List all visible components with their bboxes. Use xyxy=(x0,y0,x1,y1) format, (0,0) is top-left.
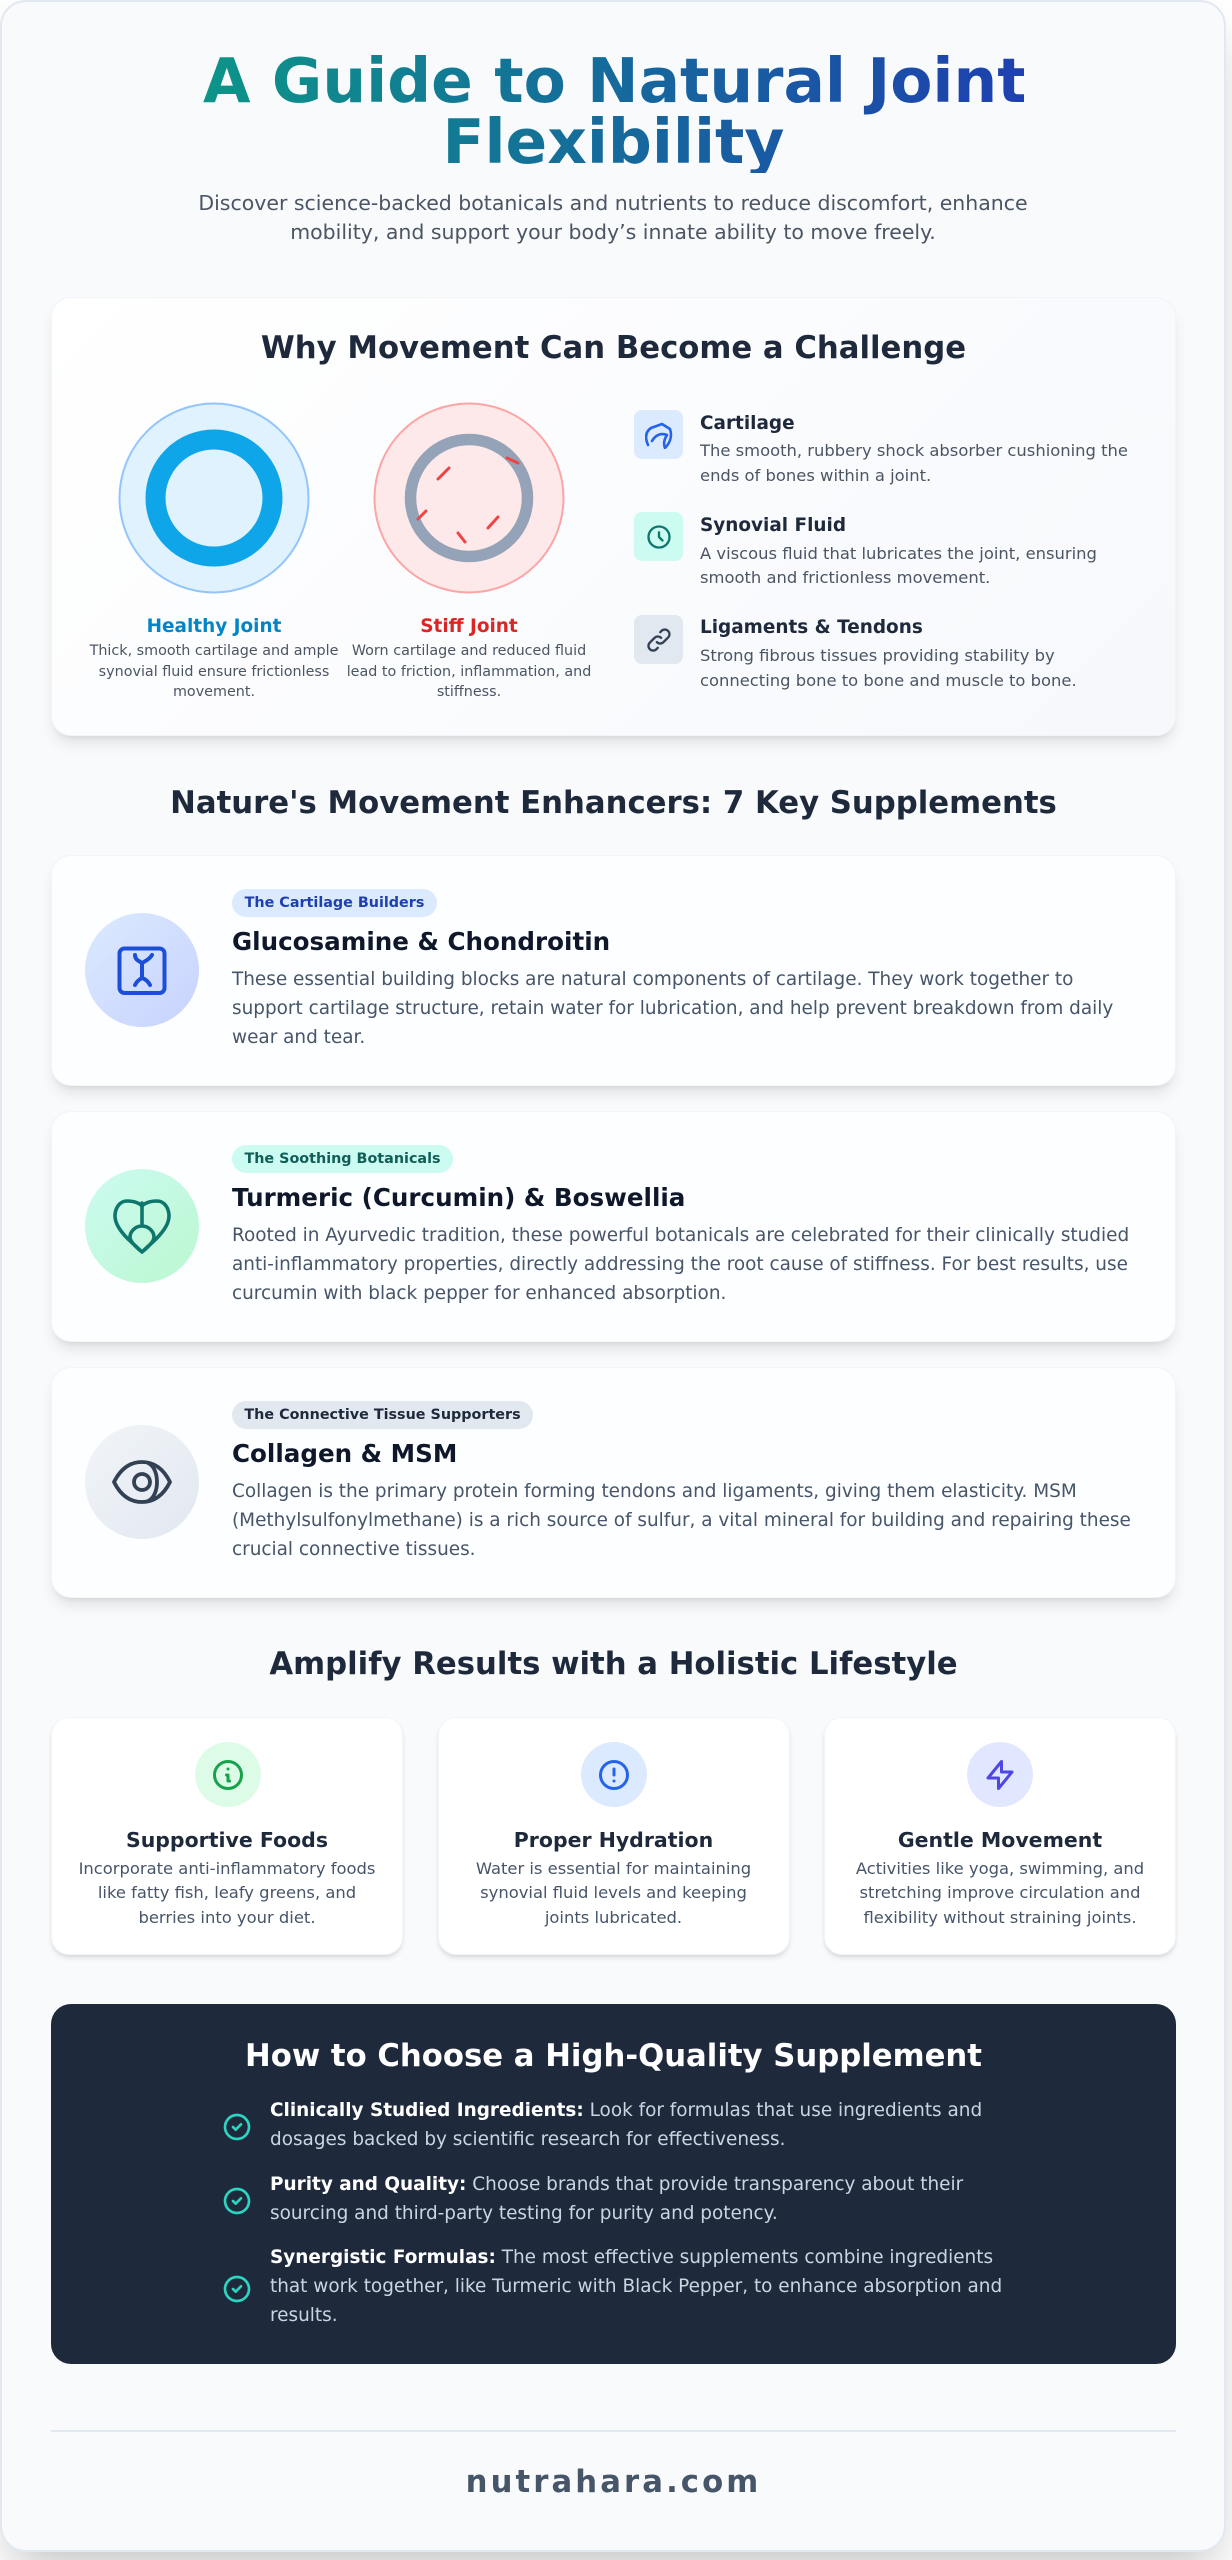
title: gentle movement: Gentle Movement xyxy=(898,1828,1102,1852)
text: purity and quality: sourcing and third-party testing for purity and potency. xyxy=(270,2203,778,2224)
text: collagen description: Collagen is the primary protein forming tendons and ligaments, giving them elasticity. MSM xyxy=(232,1481,1077,1502)
pill: the connective tissue supporters: The Connective Tissue Supporters xyxy=(244,1407,521,1423)
text: collagen description xyxy=(232,1481,1131,1560)
text: cartilage description xyxy=(700,441,1128,485)
text: glucosamine description: wear and tear. xyxy=(232,1027,365,1048)
text: gentle movement description: stretching improve circulation and xyxy=(860,1883,1140,1902)
text: synergistic formulas: Synergistic Formulas: The most effective supplements combine ingredients xyxy=(270,2247,993,2268)
title: supportive foods: Supportive Foods xyxy=(126,1828,328,1852)
title: glucosamine: Glucosamine & Chondroitin xyxy=(232,926,610,956)
text: purity and quality xyxy=(270,2174,964,2224)
text: synovial fluid title: Synovial Fluid xyxy=(700,515,846,536)
text: turmeric description: anti-inflammatory properties, directly addressing the root cause of stiffness. For best results, use xyxy=(232,1254,1128,1275)
text: turmeric description: Rooted in Ayurvedic tradition, these powerful botanicals are celebrated for their clinically studied xyxy=(232,1225,1129,1246)
label: stiff joint: Stiff Joint xyxy=(420,616,518,637)
footer divider xyxy=(51,2430,1176,2432)
text: stiff joint description: stiffness. xyxy=(437,684,501,700)
icon: cartilage xyxy=(634,410,683,459)
text: gentle movement description: flexibility without straining joints. xyxy=(863,1908,1137,1927)
panel: proper hydration xyxy=(438,1717,790,1955)
text: healthy joint description xyxy=(90,643,338,700)
heading: supplements: Nature's Movement Enhancers: 7 Key Supplements xyxy=(170,785,1057,821)
subtitle: Discover science-backed botanicals and nutrients to reduce discomfort, enhance xyxy=(198,191,1028,215)
text: glucosamine description xyxy=(232,969,1113,1048)
title: A Guide to Natural Joint xyxy=(203,46,1027,117)
subtitle: mobility, and support your body’s innate ability to move freely. xyxy=(290,220,936,244)
text: turmeric description: curcumin with black pepper for enhanced absorption. xyxy=(232,1283,726,1304)
icon: turmeric glyph xyxy=(113,1199,171,1254)
text: proper hydration description: Water is essential for maintaining xyxy=(476,1858,751,1878)
text: proper hydration description xyxy=(476,1858,751,1927)
panel: supportive foods xyxy=(51,1717,403,1955)
pill: the connective tissue supporters xyxy=(232,1401,533,1429)
text: glucosamine description: These essential building blocks are natural components of cartilage. They work together to xyxy=(232,969,1073,990)
icon: collagen circle xyxy=(85,1425,199,1539)
icon: check 3 xyxy=(224,2276,250,2302)
text: collagen description: (Methylsulfonylmethane) is a rich source of sulfur, a vital mineral for building and repairing these xyxy=(232,1510,1131,1531)
icon: glucosamine circle xyxy=(85,913,199,1027)
text: ligaments title: Ligaments & Tendons xyxy=(700,617,923,638)
text: healthy joint description: synovial fluid ensure frictionless xyxy=(99,664,329,680)
diagram: stiff joint xyxy=(374,402,564,594)
icon: synovial fluid xyxy=(634,512,683,561)
text: ligaments description xyxy=(700,646,1077,690)
panel: gentle movement xyxy=(824,1717,1176,1955)
text: glucosamine description: support cartilage structure, retain water for lubrication, and help prevent breakdown from daily xyxy=(232,998,1113,1019)
text: synergistic formulas xyxy=(270,2247,1002,2326)
text: proper hydration description: joints lubricated. xyxy=(545,1908,682,1927)
text: clinically studied: dosages backed by scientific research for effectiveness. xyxy=(270,2129,785,2150)
icon: bolt xyxy=(967,1742,1033,1807)
text: synovial fluid description: smooth and frictionless movement. xyxy=(700,568,990,587)
text: synergistic formulas: results. xyxy=(270,2305,338,2326)
text: synovial fluid description: A viscous fluid that lubricates the joint, ensuring xyxy=(700,544,1097,562)
heading: how to choose: How to Choose a High-Quality Supplement xyxy=(245,2038,982,2074)
title: proper hydration: Proper Hydration xyxy=(514,1828,713,1852)
text: supportive foods description xyxy=(79,1858,375,1927)
subtitle xyxy=(198,191,1028,244)
pill: the soothing botanicals xyxy=(232,1145,453,1173)
pill: the soothing botanicals: The Soothing Botanicals xyxy=(244,1151,441,1167)
text: clinically studied xyxy=(270,2100,982,2150)
text: cartilage description: The smooth, rubbery shock absorber cushioning the xyxy=(700,441,1128,460)
icon: ligaments and tendons xyxy=(634,615,683,664)
text: gentle movement description xyxy=(856,1858,1144,1927)
text: ligaments description: Strong fibrous tissues providing stability by xyxy=(700,646,1055,665)
icon: check 1 xyxy=(224,2114,250,2140)
diagram: healthy joint xyxy=(118,402,310,594)
text: gentle movement description: Activities like yoga, swimming, and xyxy=(856,1858,1144,1878)
text: collagen description: crucial connective tissues. xyxy=(232,1539,476,1560)
icon: glucosamine glyph xyxy=(118,946,166,995)
icon: info xyxy=(195,1742,261,1807)
title: Flexibility xyxy=(443,107,784,178)
text: turmeric description xyxy=(232,1225,1129,1304)
text: healthy joint description: movement. xyxy=(173,684,255,700)
label: healthy joint: Healthy Joint xyxy=(147,616,281,637)
text: ligaments description: connecting bone to bone and muscle to bone. xyxy=(700,671,1077,690)
icon: exclamation xyxy=(581,1742,647,1807)
text: healthy joint description: Thick, smooth cartilage and ample xyxy=(90,643,338,659)
icon: collagen glyph xyxy=(112,1460,172,1504)
title xyxy=(203,51,1024,173)
footer: website: nutrahara.com xyxy=(466,2464,761,2500)
icon: turmeric circle xyxy=(85,1169,199,1283)
text: stiff joint description: Worn cartilage and reduced fluid xyxy=(352,643,586,659)
text: purity and quality: Purity and Quality: Choose brands that provide transparency about their xyxy=(270,2174,963,2195)
panel: collagen xyxy=(51,1367,1176,1598)
text: synergistic formulas: that work together, like Turmeric with Black Pepper, to enhance absorption and xyxy=(270,2276,1002,2297)
panel: turmeric xyxy=(51,1111,1176,1342)
text: supportive foods description: like fatty fish, leafy greens, and xyxy=(98,1883,356,1902)
title: collagen: Collagen & MSM xyxy=(232,1438,457,1468)
panel: why movement xyxy=(51,297,1176,736)
pill: the cartilage builders: The Cartilage Builders xyxy=(245,895,424,911)
icon: check 2 xyxy=(224,2188,250,2214)
text: stiff joint description xyxy=(347,643,591,700)
title: turmeric: Turmeric (Curcumin) & Boswellia xyxy=(232,1182,685,1212)
text: stiff joint description: lead to friction, inflammation, and xyxy=(347,664,591,680)
heading: why movement: Why Movement Can Become a Challenge xyxy=(261,330,966,366)
panel: how to choose xyxy=(51,2004,1176,2364)
text: clinically studied: Clinically Studied Ingredients: Look for formulas that use ingredients and xyxy=(270,2100,982,2121)
text: cartilage description: ends of bones within a joint. xyxy=(700,466,931,485)
text: synovial fluid description xyxy=(700,544,1097,587)
text: cartilage title: Cartilage xyxy=(700,413,795,434)
pill: the cartilage builders xyxy=(232,889,437,917)
text: supportive foods description: berries into your diet. xyxy=(138,1908,316,1927)
text: supportive foods description: Incorporate anti-inflammatory foods xyxy=(79,1858,375,1878)
heading: holistic lifestyle: Amplify Results with a Holistic Lifestyle xyxy=(269,1646,958,1682)
panel: glucosamine xyxy=(51,855,1176,1086)
text: proper hydration description: synovial fluid levels and keeping xyxy=(480,1883,747,1902)
